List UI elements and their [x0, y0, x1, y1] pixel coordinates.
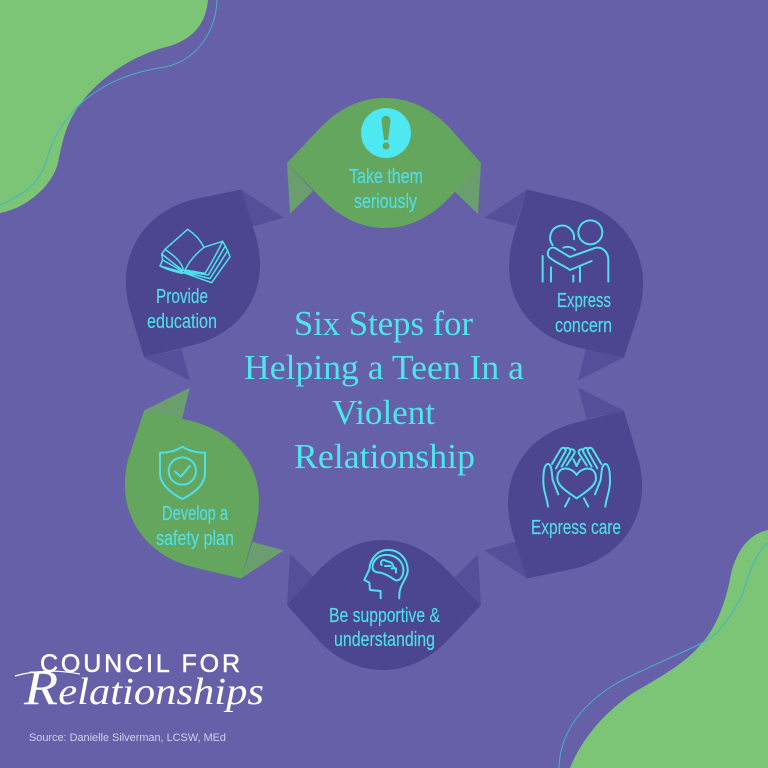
title: Six Steps for	[294, 304, 473, 343]
title: Violent	[332, 393, 435, 432]
panel: take them seriously	[287, 98, 481, 228]
icon: open book	[160, 229, 230, 283]
panel: provide education	[88, 157, 297, 390]
icon: shield with check	[160, 447, 205, 499]
label: take them seriously: seriously	[354, 190, 418, 213]
source credit: Source: Danielle Silverman, LCSW, MEd	[29, 732, 226, 744]
panel: express concern	[471, 157, 680, 390]
panel: express care	[471, 378, 680, 611]
panel: be supportive and understanding	[287, 540, 481, 670]
icon: exclamation	[361, 108, 411, 158]
label: express care: Express care	[531, 516, 621, 539]
panel: develop a safety plan	[88, 378, 297, 611]
label: develop a safety plan: safety plan	[156, 527, 234, 550]
label: take them seriously: Take them	[349, 165, 423, 188]
label: express concern: Express	[557, 289, 611, 312]
label: provide education: Provide	[156, 285, 208, 308]
title: Helping a Teen In a	[244, 348, 524, 387]
logo: Council for Relationships: Relationships	[23, 659, 264, 715]
icon: hands holding heart	[543, 448, 610, 507]
label: be supportive and understanding: understanding	[334, 628, 435, 651]
icon: head with brain	[364, 550, 408, 598]
decorative blob: bottom right	[559, 530, 768, 768]
label: develop a safety plan: Develop a	[162, 502, 228, 525]
logo: Council for Relationships: COUNCIL FOR	[40, 650, 240, 678]
label: provide education: education	[147, 310, 217, 333]
label: express concern: concern	[555, 314, 612, 337]
label: be supportive and understanding: Be supportive &	[329, 604, 440, 627]
icon: two people hugging	[543, 220, 608, 282]
decorative blob: top left	[0, 0, 217, 213]
title: Relationship	[294, 437, 475, 476]
